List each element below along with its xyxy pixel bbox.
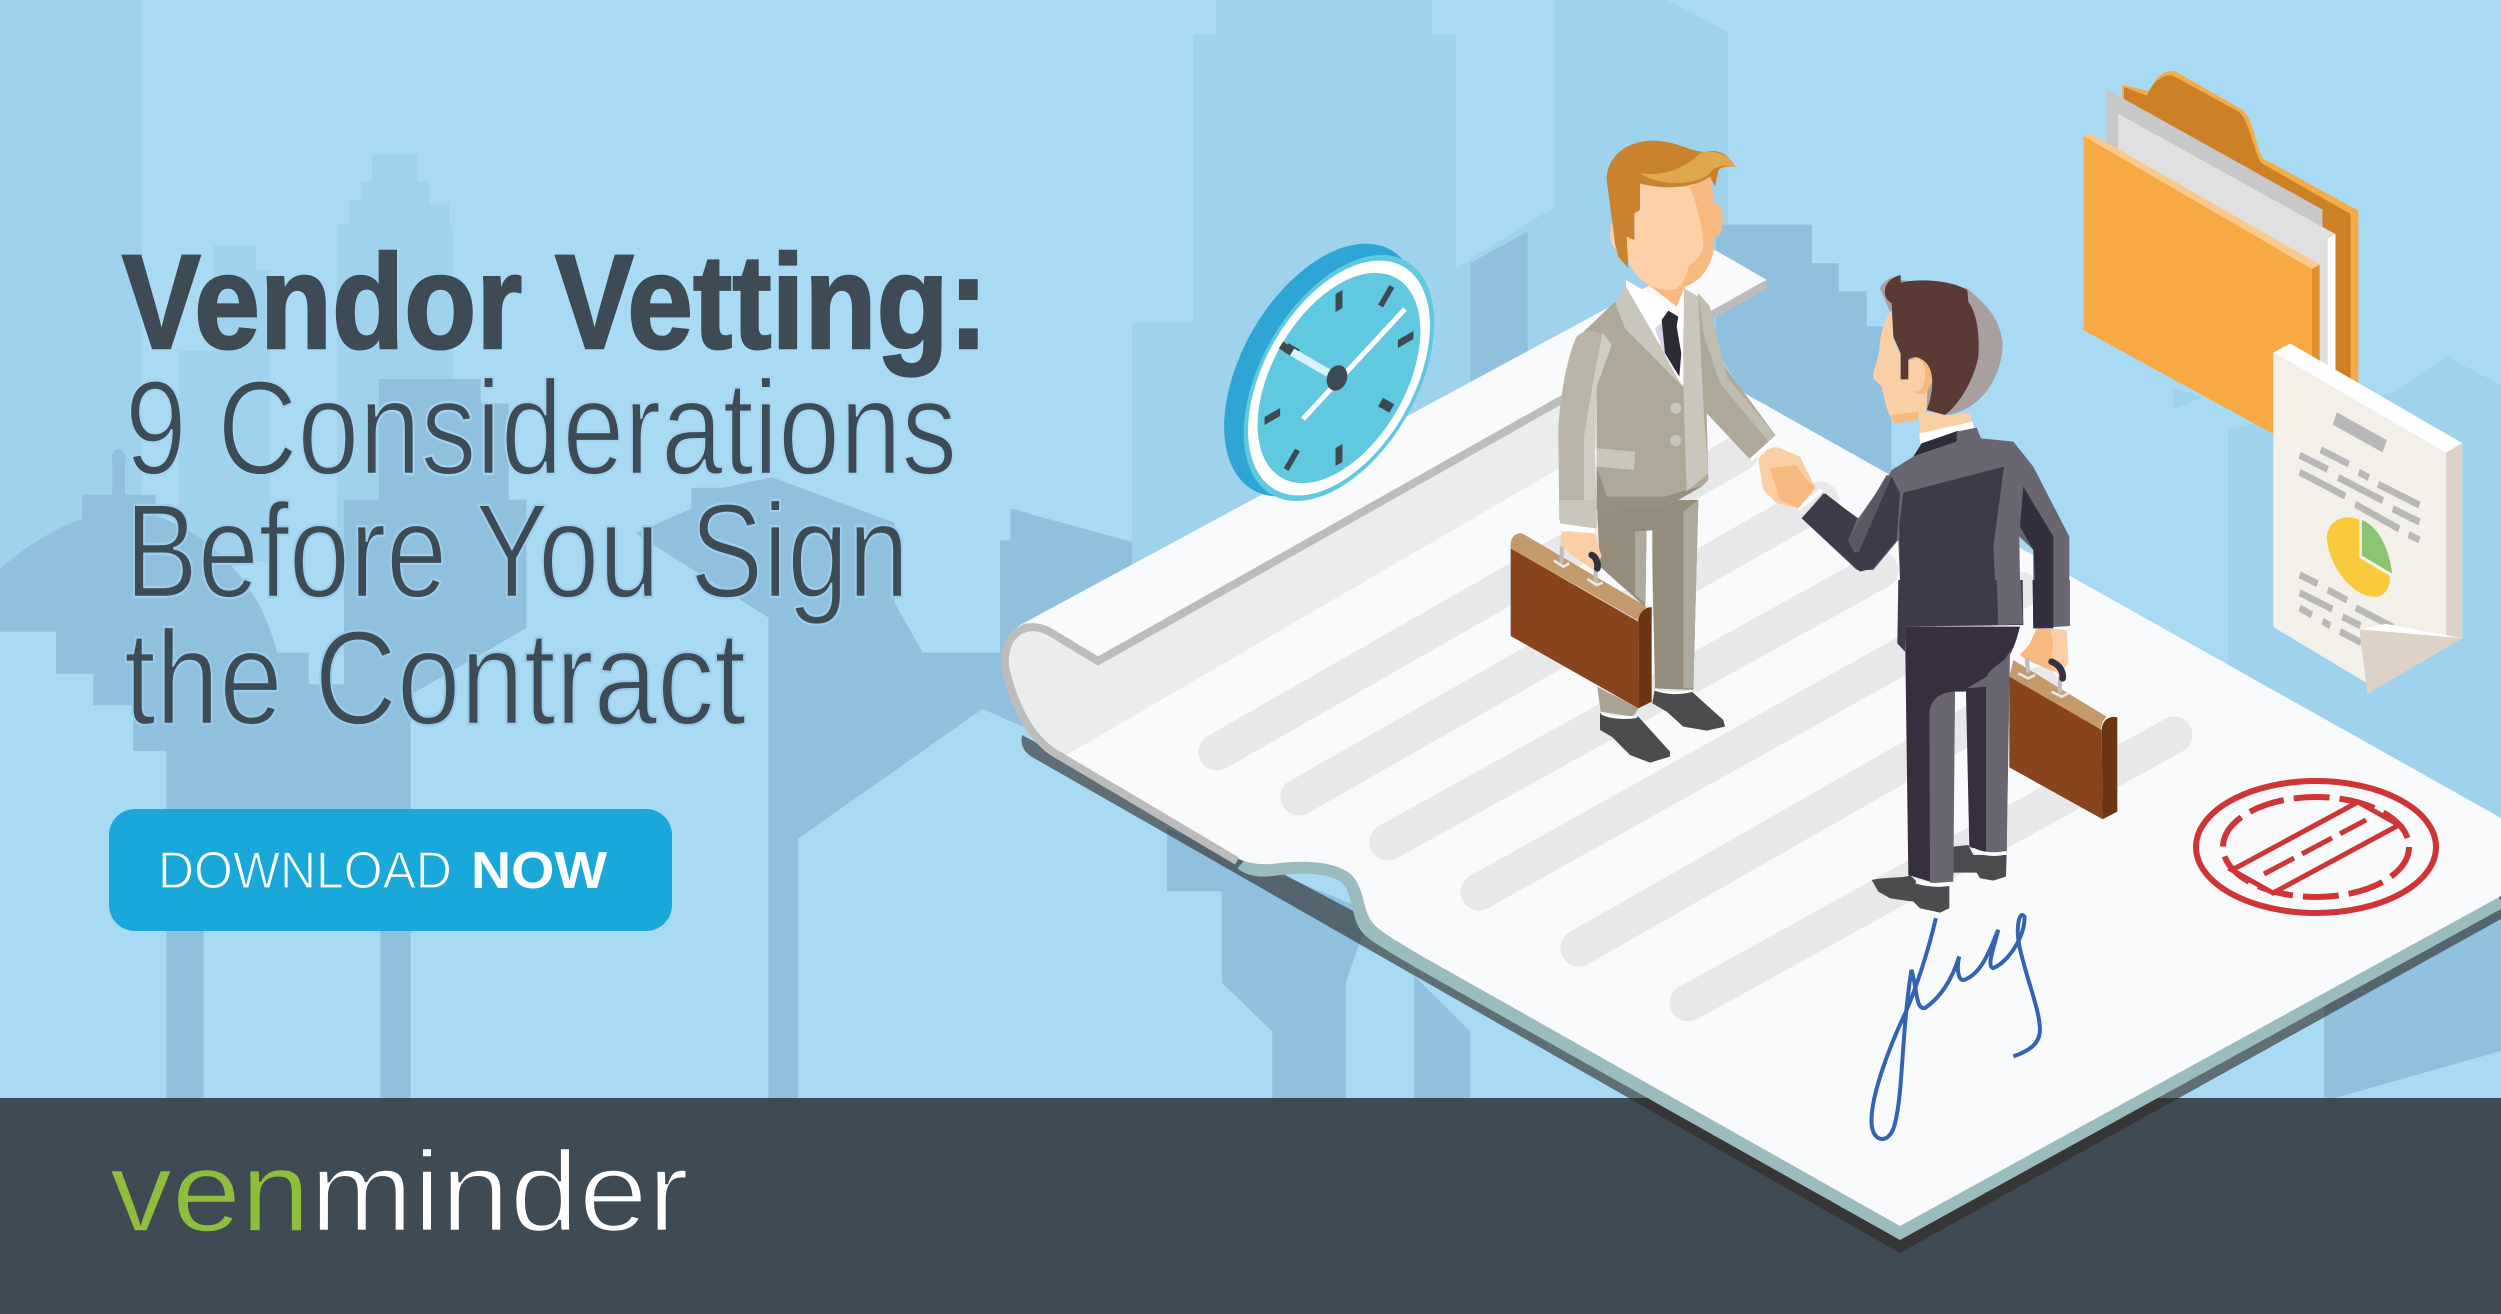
handshake (1758, 447, 1815, 508)
text lines on contract (1217, 453, 2174, 1003)
torso and head (1558, 141, 1777, 520)
trousers, shoes and briefcase (1872, 580, 2117, 913)
button: download now: DOWNLOAD (158, 842, 452, 900)
heading: Vendor Vetting: Vendor Vetting: (122, 228, 988, 377)
icon: folder with papers (2084, 71, 2358, 455)
subheading line: the Contract: the Contract (124, 604, 746, 753)
footer bar (0, 1098, 2501, 1314)
figure: man in beige suit (1511, 141, 1777, 763)
signature (1872, 915, 2040, 1139)
trousers and shoes (1597, 500, 1725, 763)
headline (122, 228, 988, 753)
subheading line: 9 Considerations: 9 Considerations (125, 354, 957, 503)
logo: venminder: venminder (110, 1129, 689, 1256)
icon: document with pie chart (2273, 344, 2462, 694)
button: download now (109, 809, 672, 931)
document text lines (2300, 419, 2419, 643)
torso and head (1780, 275, 2069, 580)
contract paper (1005, 250, 2501, 1253)
stamp (2196, 781, 2436, 913)
button: download now: NOW (471, 842, 608, 900)
figure: man in dark suit (1780, 275, 2117, 913)
hand and briefcase (1511, 500, 1652, 708)
icon: clock (1224, 200, 1434, 543)
pie chart (2327, 517, 2390, 597)
dog ear (2359, 629, 2462, 694)
subheading line: Before You Sign: Before You Sign (125, 477, 909, 626)
